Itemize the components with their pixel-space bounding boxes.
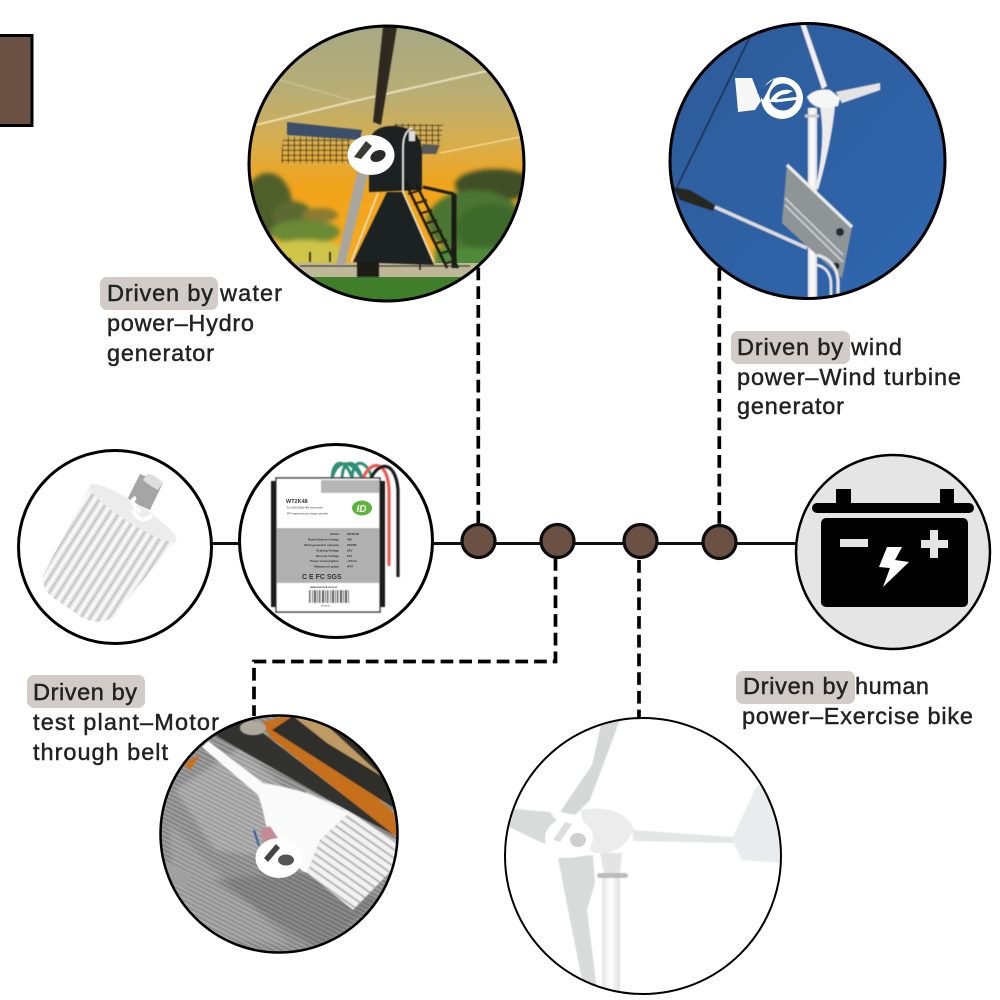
caption: hydro generator: Driven by [107, 280, 213, 306]
controller specification table: Model [330, 532, 339, 536]
battery icon circle [796, 455, 990, 649]
caption: hydro generator: power–Hydro [107, 310, 254, 336]
caption: wind turbine generator: wind [850, 334, 902, 360]
caption: exercise bike [736, 671, 973, 729]
caption: test plant motor: through belt [33, 739, 168, 765]
icon: white logo badge [348, 135, 394, 175]
generator photo circle [18, 450, 212, 644]
controller specification table: IP67 [347, 564, 354, 568]
controller specification table: WT2K48 [347, 532, 359, 536]
icon: logo on generator [133, 498, 152, 519]
brown corner tab [0, 36, 32, 126]
dashed connector: test plant motor [254, 558, 556, 716]
battery terminals [836, 489, 954, 504]
icon: logo tail vane [735, 77, 803, 119]
caption: exercise bike: Driven by [743, 673, 848, 699]
caption: hydro generator: generator [107, 340, 214, 366]
certification marks: C E FC SGS [302, 574, 342, 581]
caption: hydro generator: water [219, 280, 282, 306]
caption: exercise bike: human [855, 673, 929, 699]
caption: wind turbine generator: generator [737, 393, 844, 419]
controller specification table: <15mA [347, 559, 358, 563]
controller specification table: 54V [347, 554, 352, 558]
caption: hydro generator [100, 277, 282, 366]
caption: test plant motor [27, 675, 219, 765]
generator shaft cap [143, 474, 163, 490]
website text: www.maxrock.com.cn [310, 585, 338, 589]
icon: white logo badge [545, 818, 593, 858]
caption: wind turbine generator: power–Wind turbine [737, 364, 961, 390]
controller specification table: Power Consumption [310, 559, 339, 563]
controller specification table: 2000W [347, 543, 357, 547]
dashed connector: wind turbine generator [717, 268, 721, 525]
caption: test plant motor: Driven by [33, 679, 137, 705]
controller model title: WT2K48 [286, 499, 308, 505]
controller specification table: Wind generator capacity [304, 543, 339, 547]
black wire [371, 466, 398, 577]
green wires [332, 463, 372, 480]
controller specification table: 60V [347, 548, 352, 552]
caption: wind turbine generator [731, 331, 961, 419]
controller specification table: Waterproof grade [314, 564, 339, 568]
controller specification table: Recover Voltage [316, 554, 339, 558]
battery body [821, 518, 968, 607]
icon: green logo [352, 500, 372, 516]
controller specification table: 48V [347, 538, 352, 542]
controller specification table: Rated Battery Voltage [308, 538, 339, 542]
controller subtitle: IP67 waterproof wind charge controller [287, 512, 328, 516]
controller subtitle: For 1000-2000w 48V wind turbine [287, 506, 324, 510]
dashed connector: exercise bike [637, 560, 641, 719]
photo: white wind turbine [505, 718, 783, 998]
plus sign [921, 530, 948, 558]
lightning bolt [879, 547, 909, 587]
controller specification table: Braking Voltage [316, 548, 339, 552]
icon: white logo badge [256, 838, 302, 878]
horizontal connector line [212, 542, 796, 545]
minus sign [840, 539, 868, 547]
barcode number: WT2K48 [321, 606, 330, 608]
red wire [363, 466, 389, 566]
photo: wind turbine with solar street light [668, 22, 948, 302]
dashed connector: hydro generator [476, 268, 480, 524]
caption: test plant motor: test plant–Motor [33, 709, 219, 735]
photo: windmill at sunset [244, 25, 535, 305]
icon: green logo: ID [356, 504, 366, 515]
generator finned body [43, 487, 176, 622]
battery lid [812, 503, 974, 513]
junction nodes [462, 524, 736, 558]
generator shaft [127, 474, 163, 510]
photo: motor on test plant [158, 712, 402, 956]
controller photo circle [240, 444, 432, 638]
caption: wind turbine generator: Driven by [737, 334, 843, 360]
generator top plate [84, 477, 182, 549]
caption: exercise bike: power–Exercise bike [742, 703, 973, 729]
